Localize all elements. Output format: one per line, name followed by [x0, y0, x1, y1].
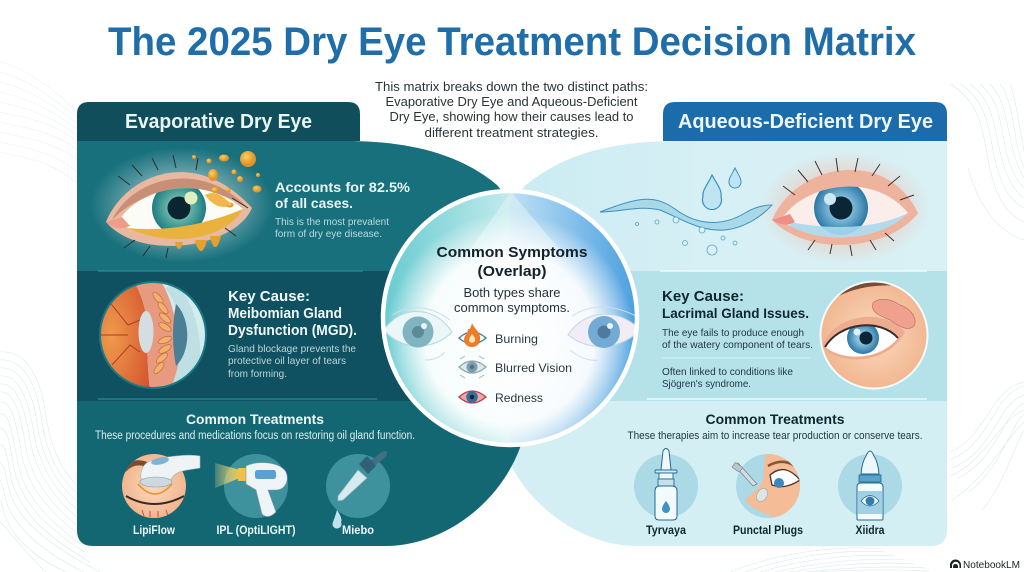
- text: key cause MGD: Gland blockage prevents the: [228, 343, 356, 355]
- text: key cause MGD: protective oil layer of tears: [228, 355, 346, 367]
- NotebookLM logo: NotebookLM: [963, 559, 1020, 571]
- text: key cause lacrimal: Key Cause:: [662, 288, 744, 305]
- text: common symptoms heading: Common Symptoms: [436, 244, 588, 261]
- text: aqueous treatments heading: These therapies aim to increase tear production or conserve tears.: [628, 430, 922, 442]
- intro text: Dry Eye, showing how their causes lead to: [390, 110, 634, 124]
- labels: symptoms: [495, 332, 572, 405]
- icon: right faded eye: [568, 307, 640, 360]
- intro text: [375, 80, 648, 140]
- icon: redness: [459, 391, 486, 403]
- text: prevalence: [275, 179, 411, 240]
- icon: water wave and droplets: [600, 168, 772, 255]
- icon: Meibomian gland cross-section: [95, 280, 208, 392]
- panel header: Evaporative Dry Eye: [77, 102, 360, 141]
- labels: evaporative treatments: [133, 525, 374, 537]
- text: key cause lacrimal: Lacrimal Gland Issues.: [662, 305, 809, 321]
- text: key cause MGD: [228, 288, 357, 380]
- intro text: different treatment strategies.: [424, 126, 598, 140]
- text: key cause lacrimal: Sjögren's syndrome.: [662, 378, 751, 390]
- icon: irritated aqueous-deficient eye: [764, 157, 922, 258]
- labels: symptoms: Burning: [495, 332, 538, 346]
- panel: aqueous-deficient background: [490, 141, 950, 547]
- text: key cause MGD: Dysfunction (MGD).: [228, 322, 357, 339]
- text: key cause lacrimal: The eye fails to produce enough: [662, 327, 804, 339]
- icon: left faded eye: [384, 308, 452, 360]
- text: key cause lacrimal: [662, 288, 813, 390]
- labels: symptoms: Redness: [495, 391, 543, 405]
- icon: IPL device: [215, 454, 288, 518]
- icon: Tyrvaya nasal spray: [634, 448, 698, 520]
- icon: evaporative eye with oil droplets: [90, 147, 274, 263]
- text: prevalence: of all cases.: [275, 195, 353, 211]
- text: common symptoms heading: Both types share: [464, 286, 561, 300]
- text: prevalence: form of dry eye disease.: [275, 229, 382, 240]
- icon: punctal plugs: [732, 454, 800, 518]
- icon: Xiidra bottle: [838, 451, 902, 520]
- text: prevalence: This is the most prevalent: [275, 217, 389, 228]
- text: evaporative treatments heading: Common Treatments: [186, 411, 324, 427]
- text: key cause MGD: from forming.: [228, 368, 287, 380]
- panel header: Aqueous-Deficient Dry Eye: Aqueous-Deficient Dry Eye: [678, 111, 933, 133]
- text: common symptoms heading: (Overlap): [478, 263, 546, 280]
- text: key cause MGD: Key Cause:: [228, 288, 310, 305]
- text: aqueous treatments heading: [628, 411, 922, 442]
- labels: aqueous treatments: Punctal Plugs: [733, 525, 803, 537]
- labels: aqueous treatments: Xiidra: [856, 525, 885, 537]
- text: key cause lacrimal: Often linked to conditions like: [662, 366, 793, 378]
- icon: LipiFlow: [122, 454, 200, 518]
- icon: blurred vision: [459, 356, 486, 378]
- panel header: Evaporative Dry Eye: Evaporative Dry Eye: [125, 111, 312, 133]
- text: aqueous treatments heading: Common Treatments: [706, 411, 845, 427]
- panel: common symptoms overlap circle: [383, 190, 640, 446]
- text: evaporative treatments heading: [95, 411, 415, 442]
- icon: lacrimal gland portrait: [820, 280, 930, 390]
- text: common symptoms heading: common symptoms.: [454, 301, 570, 315]
- panel header: Aqueous-Deficient Dry Eye: [663, 102, 947, 141]
- icon: burning: [459, 323, 486, 347]
- labels: evaporative treatments: Miebo: [342, 525, 374, 537]
- dividers: [98, 271, 377, 399]
- labels: evaporative treatments: IPL (OptiLIGHT): [216, 525, 296, 537]
- intro text: This matrix breaks down the two distinct paths:: [375, 80, 648, 94]
- text: common symptoms heading: [436, 244, 588, 315]
- text: key cause lacrimal: of the watery component of tears.: [662, 339, 813, 351]
- text: evaporative treatments heading: These procedures and medications focus on restoring oil gland function.: [95, 430, 415, 442]
- text: key cause MGD: Meibomian Gland: [228, 305, 342, 322]
- labels: evaporative treatments: LipiFlow: [133, 525, 175, 537]
- icon: Miebo dropper: [326, 451, 390, 529]
- title: The 2025 Dry Eye Treatment Decision Matrix: [108, 20, 916, 64]
- labels: symptoms: Blurred Vision: [495, 361, 572, 375]
- panel: evaporative background: [77, 141, 537, 547]
- intro text: Evaporative Dry Eye and Aqueous-Deficient: [386, 95, 638, 109]
- text: prevalence: Accounts for 82.5%: [275, 179, 411, 195]
- labels: aqueous treatments: Tyrvaya: [646, 525, 687, 537]
- labels: aqueous treatments: [646, 525, 885, 537]
